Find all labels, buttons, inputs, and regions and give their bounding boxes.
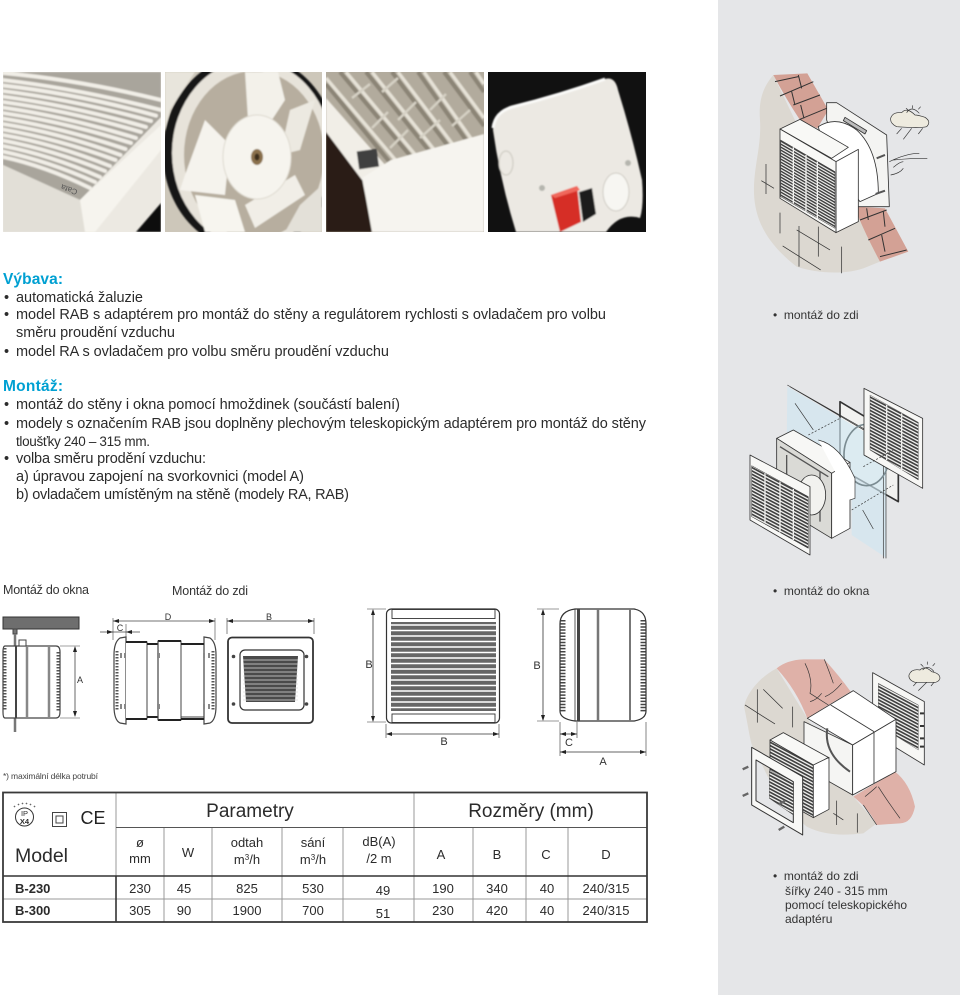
label: wall mounting: • montáž do zdi — [773, 308, 859, 322]
photo: louvre detail — [3, 72, 161, 232]
label: wall mounting with adapter: • montáž do zdi — [773, 869, 859, 883]
bullet list: equipment — [4, 290, 606, 360]
bullet list: mounting: a) úpravou zapojení na svorkovnici (model A) — [16, 469, 304, 485]
diagram heading: wall mount: Montáž do zdi — [172, 584, 248, 598]
illustration: wall mounting — [754, 73, 929, 273]
label: wall mounting with adapter — [773, 869, 907, 926]
diagram: side view with dimensions — [533, 609, 646, 768]
diagram: window mount side view — [3, 617, 83, 732]
row: B-300: 700 — [302, 903, 324, 918]
bullet list: equipment: • — [4, 290, 9, 306]
photo: wall controller — [488, 72, 646, 232]
icon: sun and rain cloud — [909, 662, 940, 691]
row: B-230: 240/315 — [582, 881, 630, 896]
text block: Výbava — [3, 271, 606, 360]
column headers: m — [300, 852, 311, 867]
icon: IP X4 protection: X4 — [20, 817, 30, 826]
text block: Montáž — [3, 378, 647, 503]
diagram: grille front view: B — [365, 659, 373, 671]
heading: Výbava: Výbava: — [3, 271, 63, 288]
row: B-300: 51 — [376, 906, 390, 921]
row: B-300: 305 — [129, 903, 151, 918]
bullet list: mounting: • — [4, 451, 9, 467]
column headers — [129, 834, 611, 867]
bullet list: equipment: směru proudění vzduchu — [16, 325, 175, 341]
diagram: side view with dimensions: C — [565, 737, 573, 749]
diagram: wall mount front view — [227, 612, 314, 723]
row: B-230: 190 — [432, 881, 454, 896]
row: B-230: 825 — [236, 881, 258, 896]
column headers: sání — [301, 835, 326, 850]
heading: Parametry: Parametry — [206, 801, 294, 822]
column headers: mm — [129, 851, 151, 866]
label: wall mounting with adapter: pomocí teleskopického — [785, 898, 907, 912]
row: B-230: B-230 — [15, 881, 50, 896]
photo strip — [3, 55, 646, 251]
bullet list: mounting: volba směru prodění vzduchu: — [16, 451, 206, 467]
bullet list: mounting: • — [4, 397, 9, 413]
table grid — [3, 792, 647, 922]
diagram: wall mount front view: B — [266, 612, 272, 622]
row: B-300: 90 — [177, 903, 191, 918]
illustration: window mounting exploded — [750, 385, 923, 558]
row: B-230: 230 — [129, 881, 151, 896]
diagram: side view with dimensions: B — [533, 660, 541, 672]
column headers: C — [541, 847, 551, 862]
heading: Model: Model — [15, 845, 68, 867]
bullet list: mounting: tloušťky 240 – 315 mm. — [16, 434, 150, 449]
bullet list: equipment: model RAB s adaptérem pro montáž do stěny a regulátorem rychlosti s ovladačem pro volbu — [16, 307, 606, 323]
column headers: /2 m — [366, 851, 392, 866]
column headers: dB(A) — [362, 834, 396, 849]
table: parameters and dimensions — [3, 792, 647, 922]
diagram: side view with dimensions: A — [599, 756, 607, 768]
bullet list: equipment: • — [4, 307, 9, 323]
column headers: /h — [315, 852, 326, 867]
column headers: m — [234, 852, 245, 867]
column headers: A — [437, 847, 446, 862]
bullet list: mounting: modely s označením RAB jsou doplněny plechovým teleskopickým adaptérem pro montáž do stěny — [16, 416, 647, 432]
diagram: window mount side view: A — [77, 675, 83, 685]
icon: sun and rain cloud — [891, 105, 929, 139]
row: B-230: 530 — [302, 881, 324, 896]
photo: louvre and body corner — [326, 72, 484, 232]
column headers: W — [182, 845, 195, 860]
diagram: wall mount telescopic side view: D — [165, 612, 172, 622]
row: B-300: 1900 — [233, 903, 261, 918]
diagram: grille front view: B — [440, 736, 448, 748]
illustration: wall mounting with telescopic adapter — [743, 659, 940, 835]
panel: right grey sidebar — [718, 0, 960, 995]
bullet list: equipment: • — [4, 344, 9, 360]
bullet list: equipment: model RA s ovladačem pro volbu směru proudění vzduchu — [16, 344, 389, 360]
icon: CE mark: CE — [80, 808, 106, 828]
diagram: grille front view — [365, 609, 500, 748]
bullet list: mounting — [4, 397, 647, 503]
heading: Rozměry: Rozměry (mm) — [468, 801, 594, 822]
row: B-300 — [15, 903, 630, 921]
icon: IP X4 protection: IP — [21, 809, 28, 818]
row: B-230: 340 — [486, 881, 508, 896]
heading: Montáž: Montáž: — [3, 378, 63, 395]
bullet list: mounting: • — [4, 416, 9, 432]
bullet list: mounting: b) ovladačem umístěným na stěně (modely RA, RAB) — [16, 487, 349, 503]
column headers: /h — [249, 852, 260, 867]
icon: double insulation — [52, 812, 66, 826]
label: window mounting: • montáž do okna — [773, 584, 870, 598]
footnote: *) maximální délka potrubí — [3, 771, 99, 781]
column headers: odtah — [231, 835, 263, 850]
photo: impeller — [165, 72, 322, 232]
row: B-300: 230 — [432, 903, 454, 918]
row: B-230: 40 — [540, 881, 554, 896]
row: B-300: 240/315 — [582, 903, 630, 918]
label: wall mounting with adapter: adaptéru — [785, 912, 832, 926]
column headers: 3 — [245, 853, 250, 862]
bullet list: mounting: montáž do stěny i okna pomocí hmoždinek (součástí balení) — [16, 397, 400, 413]
photo: louvre detail: Cata — [59, 182, 79, 197]
row: B-300: B-300 — [15, 903, 50, 918]
row: B-230: 49 — [376, 883, 390, 898]
diagram heading: window mount: Montáž do okna — [3, 583, 89, 597]
label: wall mounting with adapter: šířky 240 - 315 mm — [785, 884, 888, 898]
row: B-230: 45 — [177, 881, 191, 896]
column headers: D — [601, 847, 611, 862]
icon: IP X4 protection — [14, 803, 35, 826]
row: B-300: 420 — [486, 903, 508, 918]
bullet list: equipment: automatická žaluzie — [16, 290, 143, 306]
diagram: wall mount telescopic side view — [100, 612, 216, 724]
column headers: 3 — [311, 853, 316, 862]
diagram: wall mount telescopic side view: C — [117, 623, 124, 633]
column headers: B — [493, 847, 501, 862]
row: B-300: 40 — [540, 903, 554, 918]
row: B-230 — [15, 881, 630, 898]
column headers: ø — [136, 835, 144, 850]
